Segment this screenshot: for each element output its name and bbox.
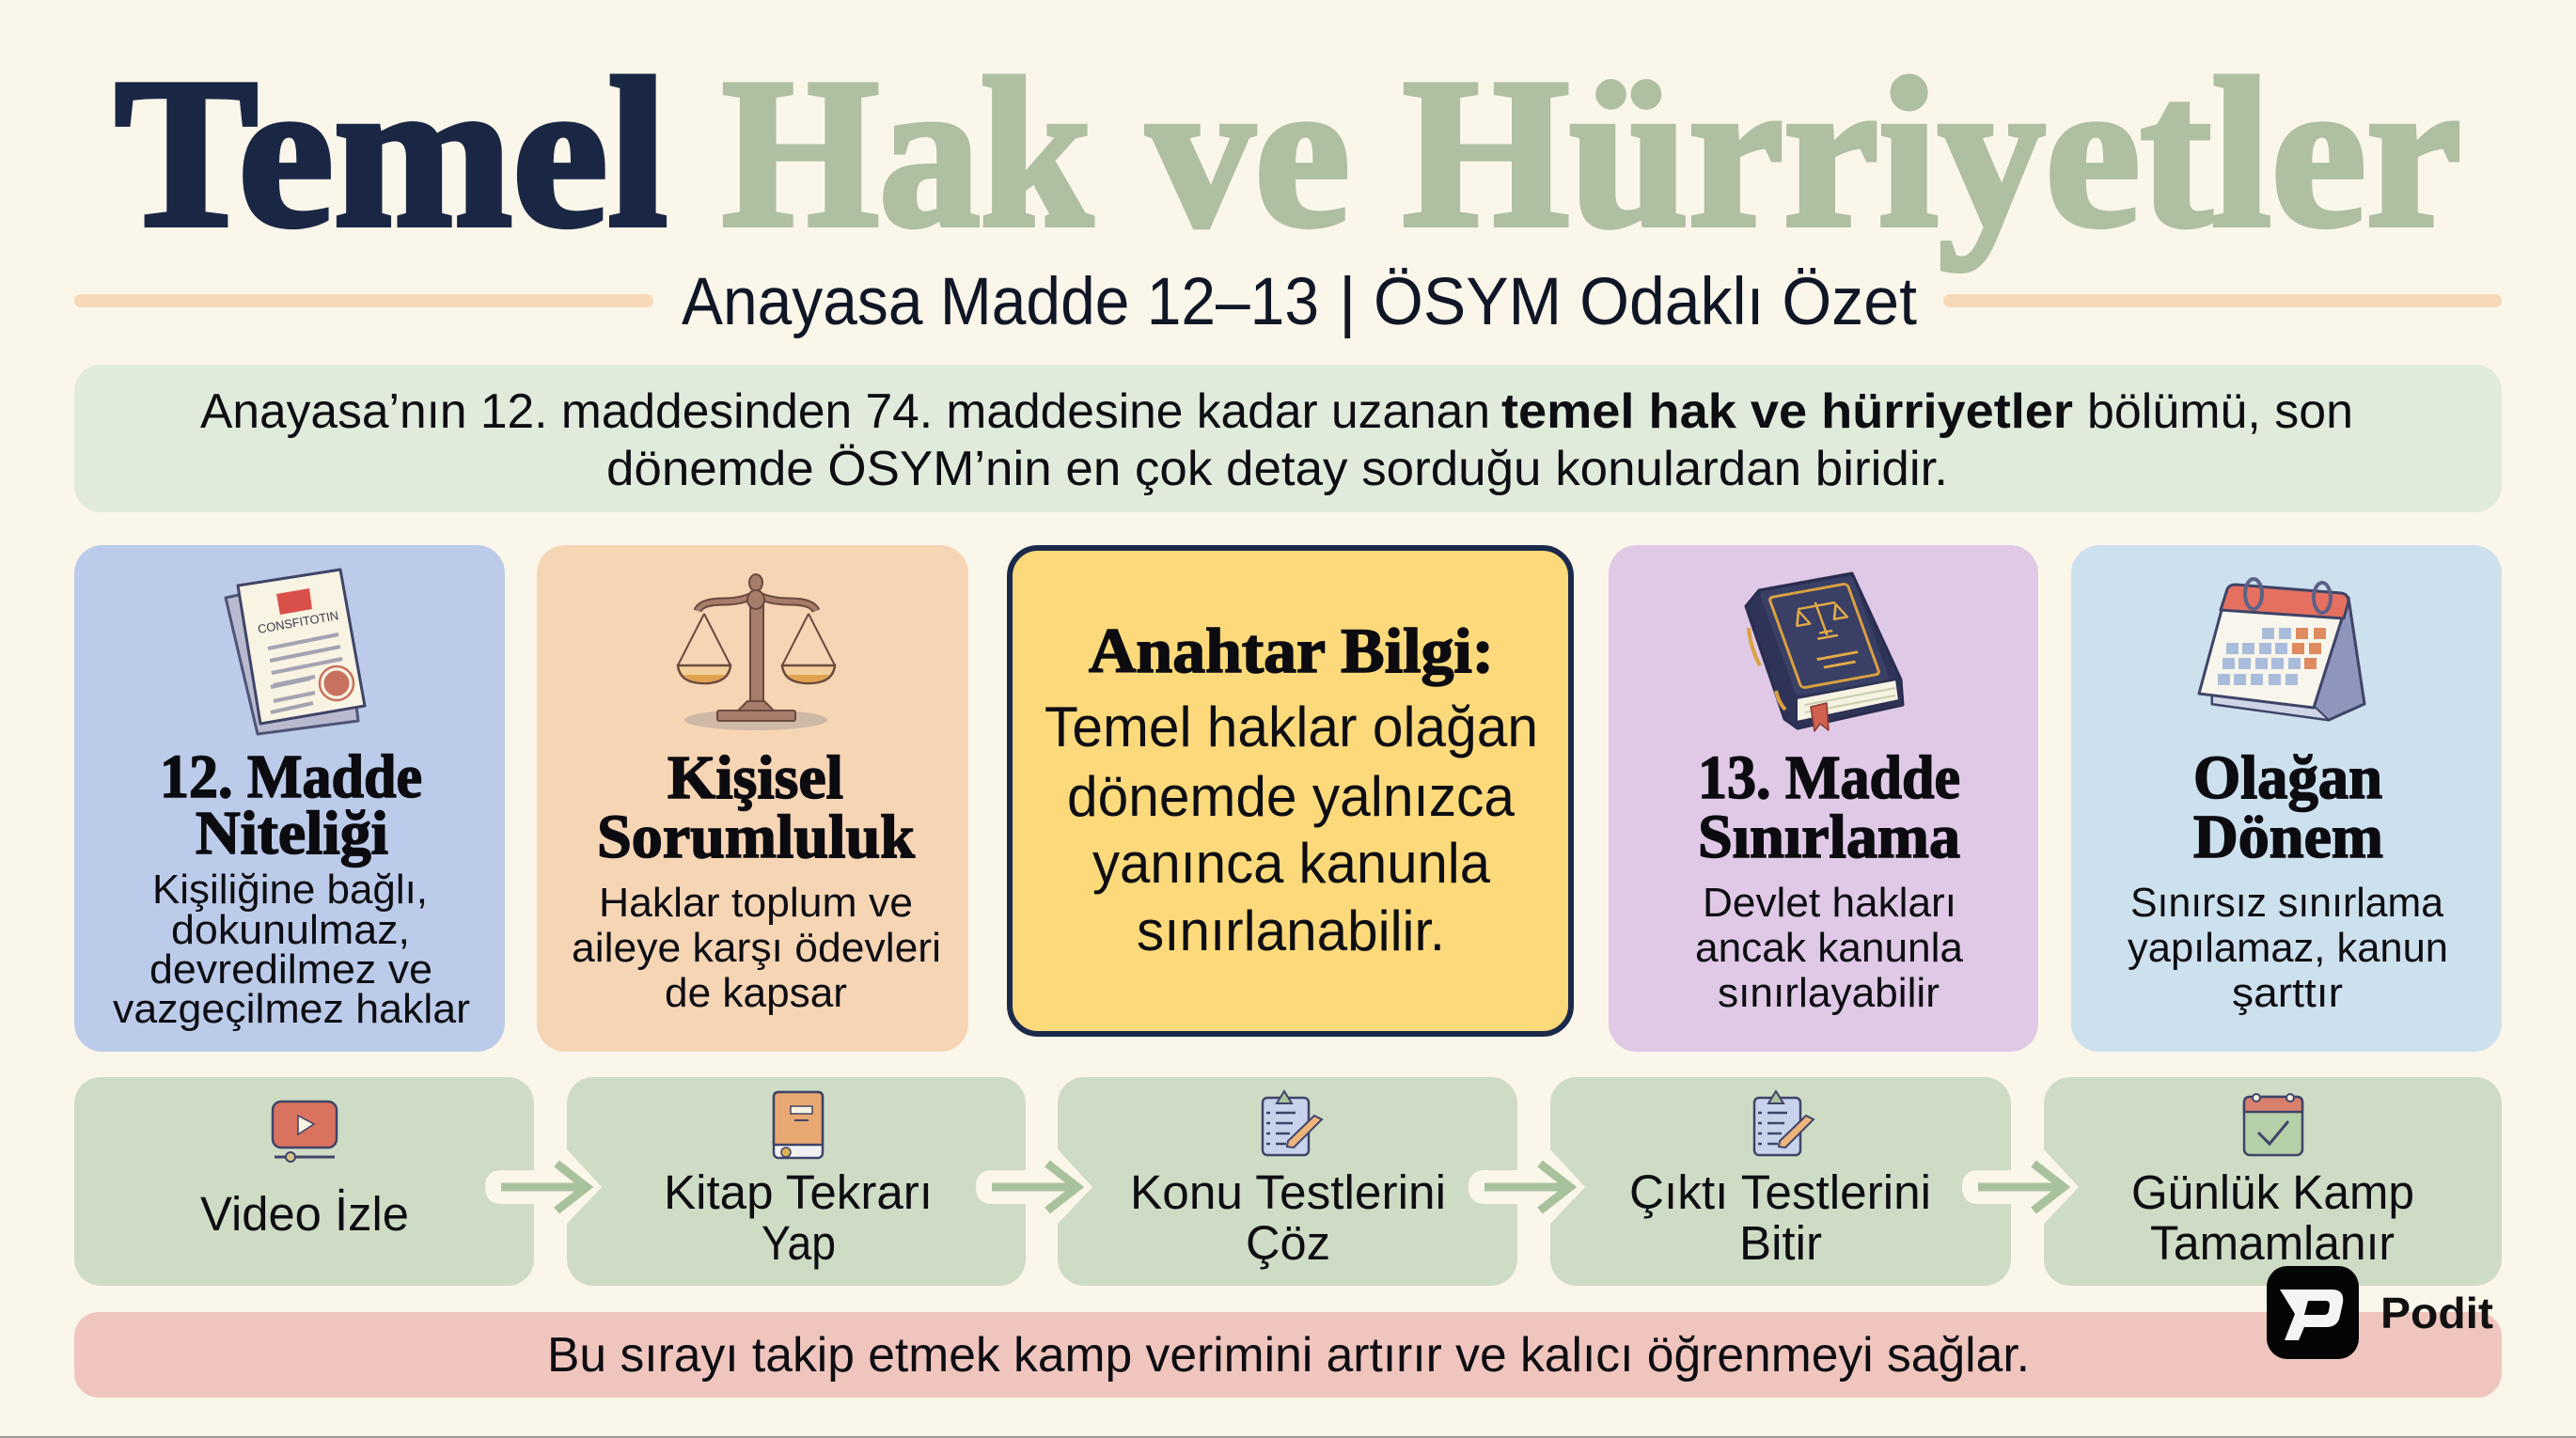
label: [1629, 1165, 1931, 1270]
panel: Anahtar Bilgi callout: [1010, 548, 1571, 1034]
body text: de kapsar: [665, 970, 847, 1016]
step: Kitap Tekrarı Yap: [567, 1077, 1026, 1286]
step: Video İzle: [74, 1077, 534, 1286]
icon: clipboard with pencil: [1263, 1091, 1322, 1155]
icon: calendar check: [2244, 1094, 2302, 1155]
body text: aileye karşı ödevleri: [572, 925, 941, 971]
intro banner: [74, 365, 2502, 512]
heading: Dönem: [2193, 803, 2383, 871]
title: Hak: [722, 36, 1092, 272]
label: Kitap Tekrarı: [664, 1165, 933, 1219]
intro banner: Anayasa’nın 12. maddesinden 74. maddesine kadar uzanan: [200, 384, 1490, 439]
icon: scales of justice: [678, 574, 835, 730]
arrow: step 2 to 3: [976, 1149, 1092, 1224]
label: Konu Testlerini: [1130, 1165, 1446, 1219]
step: Çıktı Testlerini Bitir: [1550, 1077, 2011, 1286]
icon: constitution document: [226, 570, 365, 734]
subtitle with accent lines: [74, 265, 2502, 339]
arrow: step 4 to 5: [1962, 1149, 2079, 1224]
subtitle with accent lines: Anayasa Madde 12–13: [682, 265, 1319, 339]
intro banner: temel hak ve hürriyetler: [1501, 384, 2073, 439]
body text: şarttır: [2232, 970, 2343, 1016]
heading: [597, 743, 915, 871]
body text: Devlet hakları: [1703, 880, 1956, 926]
heading: Kişisel: [668, 743, 843, 812]
title: Hürriyetler: [1403, 36, 2461, 272]
panel: 12. Madde Niteliği: [74, 545, 505, 1052]
bottom note bar: Bu sırayı takip etmek kamp verimini artırır ve kalıcı öğrenmeyi sağlar.: [547, 1328, 2030, 1383]
label: [664, 1165, 933, 1270]
title: ve: [1147, 36, 1350, 272]
body text: devredilmez ve: [149, 946, 432, 993]
body text: Sınırsız sınırlama: [2130, 880, 2444, 926]
body text: [2128, 880, 2448, 1016]
body text: Haklar toplum ve: [599, 880, 913, 926]
callout text: Temel haklar olağan: [1045, 696, 1538, 758]
icon: small book: [774, 1092, 823, 1158]
body text: dokunulmaz,: [171, 907, 410, 953]
label: Video İzle: [200, 1187, 409, 1241]
logo: Podit: Podit: [2380, 1289, 2493, 1337]
callout text: yanınca kanunla: [1092, 832, 1491, 895]
body text: [1695, 880, 1964, 1016]
intro banner: bölümü, son: [2087, 384, 2353, 439]
logo: Podit: [2267, 1266, 2493, 1359]
heading: Anahtar Bilgi:: [1089, 615, 1494, 686]
body text: vazgeçilmez haklar: [113, 986, 470, 1032]
callout text: sınırlanabilir.: [1137, 899, 1445, 962]
body text: yapılamaz, kanun: [2128, 925, 2448, 971]
label: Tamamlanır: [2150, 1216, 2395, 1270]
step: Günlük Kamp Tamamlanır: [2044, 1077, 2502, 1286]
label: Yap: [762, 1216, 836, 1270]
panel: Olağan Dönem: [2071, 545, 2502, 1052]
label: Günlük Kamp: [2131, 1165, 2414, 1219]
label: Çıktı Testlerini: [1629, 1165, 1931, 1219]
heading: Sınırlama: [1698, 803, 1960, 871]
bottom note bar: [74, 1312, 2502, 1398]
callout text: [1045, 696, 1538, 962]
subtitle with accent lines: |: [1339, 265, 1356, 339]
icon: constitution document: CONSFITOTIN: [257, 608, 339, 636]
label: Çöz: [1246, 1216, 1330, 1270]
step: Konu Testlerini Çöz: [1058, 1077, 1517, 1286]
icon: desk calendar: [2199, 579, 2364, 720]
icon: video player: [273, 1102, 337, 1162]
heading: Olağan: [2193, 743, 2382, 812]
panel: 13. Madde Sınırlama: [1609, 545, 2038, 1052]
label: [1130, 1165, 1446, 1270]
title: Temel: [115, 36, 668, 272]
arrow: step 1 to 2: [485, 1149, 602, 1224]
icon: clipboard with pencil: [1754, 1091, 1814, 1155]
heading: 13. Madde: [1698, 743, 1960, 812]
label: Bitir: [1739, 1216, 1822, 1270]
heading: 12. Madde: [160, 742, 422, 811]
heading: [1698, 743, 1960, 871]
body text: Kişiliğine bağlı,: [152, 867, 428, 913]
body text: ancak kanunla: [1695, 925, 1964, 971]
heading: Sorumluluk: [597, 803, 915, 871]
title: [115, 36, 2461, 272]
label: [2131, 1165, 2414, 1270]
subtitle with accent lines: ÖSYM Odaklı Özet: [1374, 265, 1917, 339]
icon: law book: [1746, 573, 1903, 731]
body text: sınırlayabilir: [1718, 970, 1940, 1016]
heading: [2193, 743, 2383, 871]
heading: Niteliği: [196, 799, 388, 867]
heading: [160, 742, 422, 867]
body text: [113, 867, 470, 1032]
body text: [572, 880, 941, 1016]
intro banner: dönemde ÖSYM’nin en çok detay sorduğu konulardan biridir.: [606, 442, 1948, 496]
arrow: step 3 to 4: [1469, 1149, 1585, 1224]
callout text: dönemde yalnızca: [1067, 765, 1516, 828]
panel: Kişisel Sorumluluk: [537, 545, 968, 1052]
